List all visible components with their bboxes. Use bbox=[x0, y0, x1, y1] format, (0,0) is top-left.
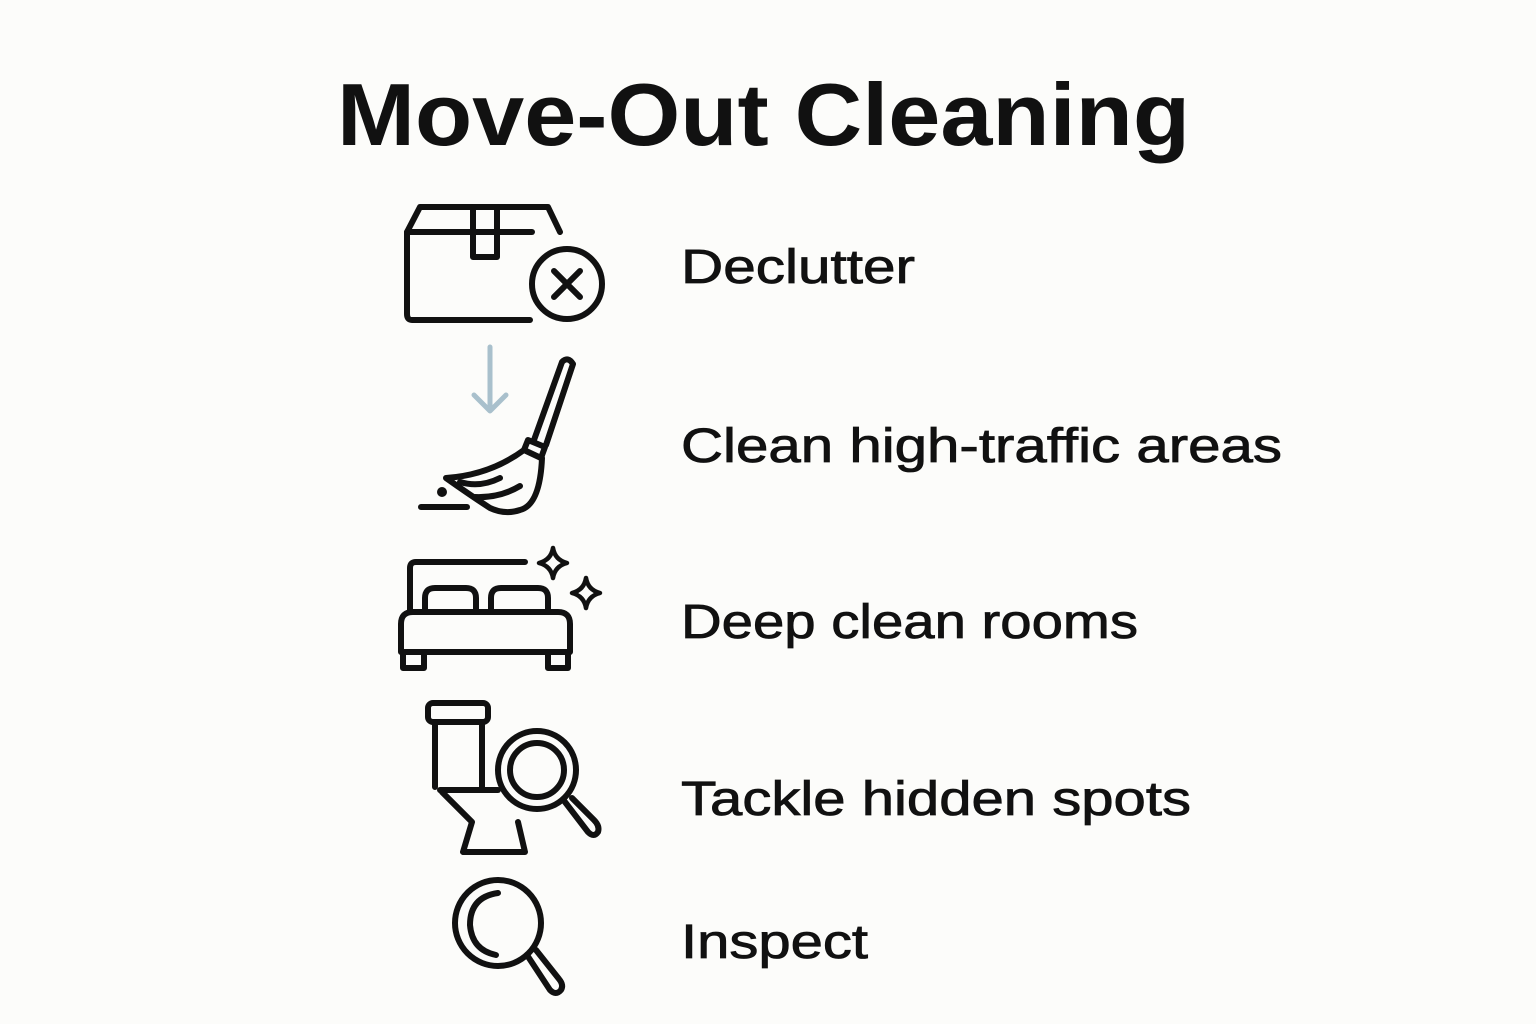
label: Clean high-traffic areas bbox=[681, 420, 1282, 473]
step 3: deep clean rooms bbox=[401, 548, 1138, 668]
icon: broom bbox=[421, 359, 573, 512]
step 5: inspect bbox=[455, 880, 868, 993]
step 1: declutter bbox=[407, 207, 915, 320]
icon: toilet with magnifier bbox=[428, 703, 598, 852]
label: Deep clean rooms bbox=[681, 596, 1138, 649]
arrow bbox=[474, 347, 506, 411]
title: Move-Out Cleaning bbox=[337, 65, 1190, 164]
step 4: tackle hidden spots bbox=[428, 703, 1191, 852]
step 2: clean high-traffic bbox=[421, 359, 1282, 512]
label: declutter: Declutter bbox=[681, 241, 915, 294]
label: Inspect bbox=[681, 916, 868, 969]
icon: box with x bbox=[407, 207, 602, 320]
icon: magnifier bbox=[455, 880, 562, 993]
icon: bed with sparkles bbox=[401, 548, 600, 668]
label: Tackle hidden spots bbox=[681, 773, 1191, 826]
